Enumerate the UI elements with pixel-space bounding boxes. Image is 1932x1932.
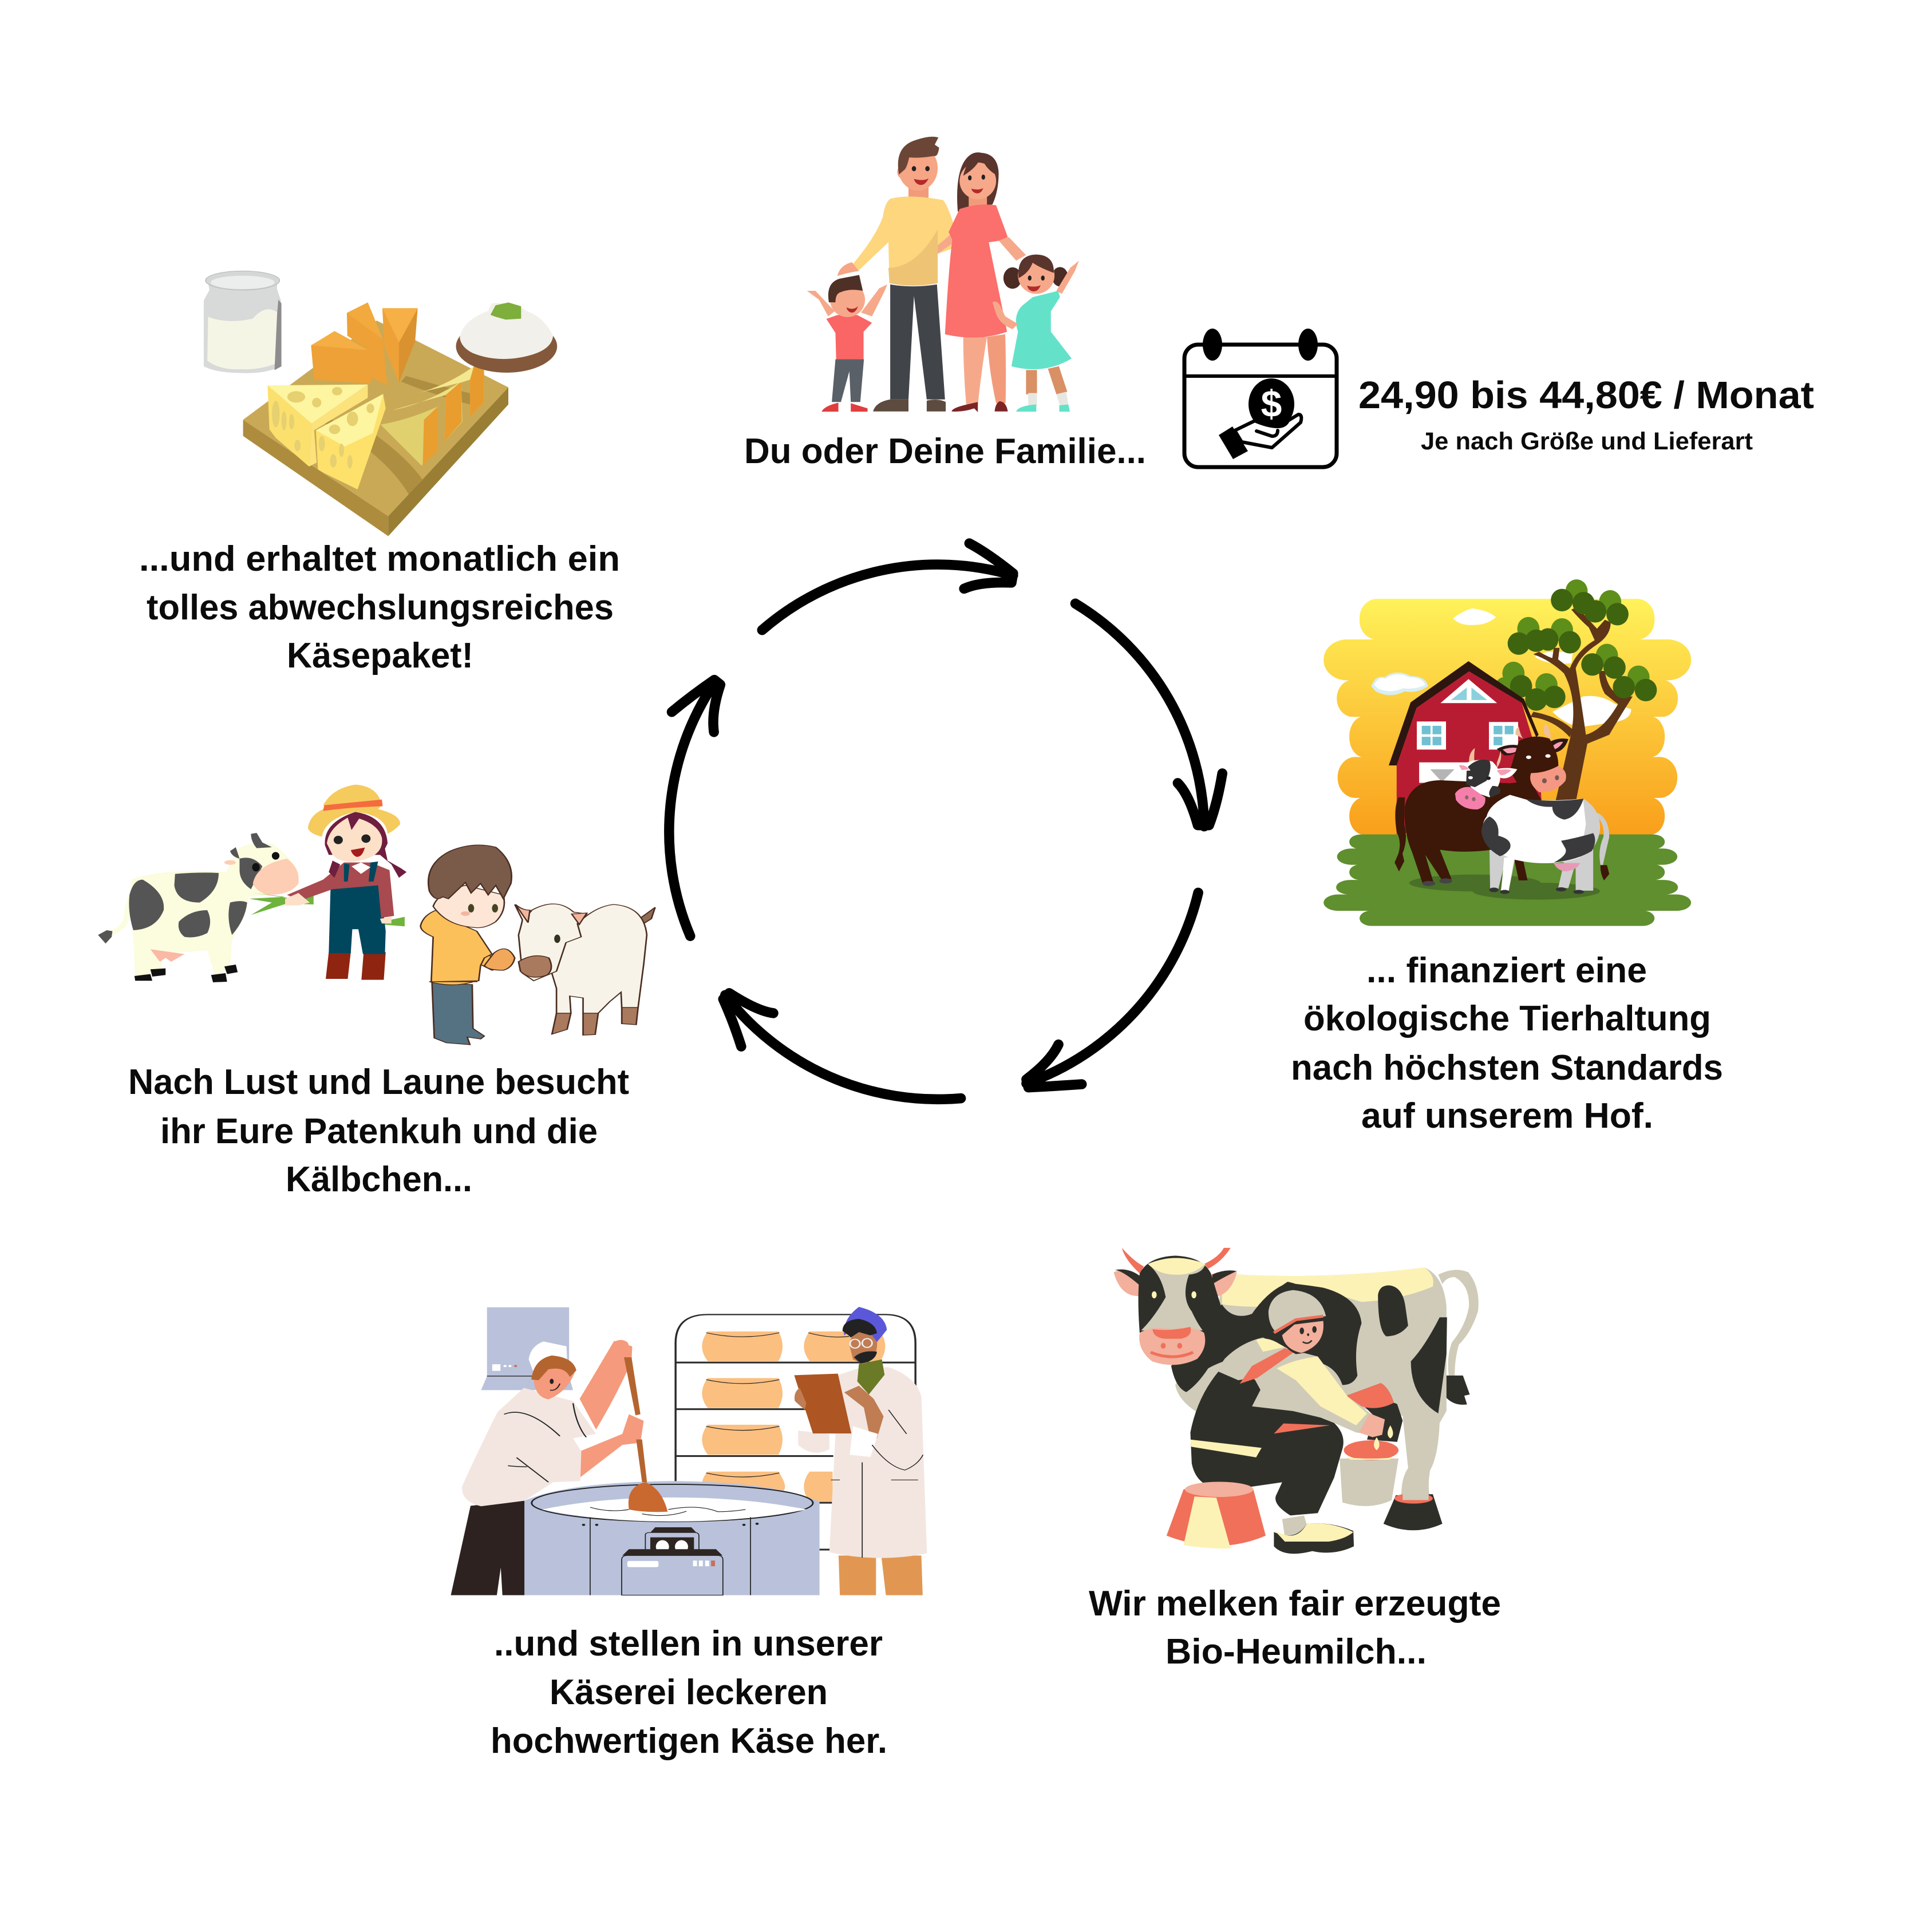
text: dairy caption [491, 1624, 887, 1761]
text: farm caption: nach höchsten Standards [1291, 1048, 1723, 1088]
text: cheese package caption: ...und erhaltet monatlich ein [139, 539, 620, 579]
icon: family illustration [807, 137, 1079, 412]
icon: cheese makers in dairy [451, 1307, 927, 1595]
left cheesemaker [451, 1340, 667, 1595]
arrow: milking to dairy [1026, 892, 1198, 1088]
arrow: dairy to visit [723, 993, 961, 1099]
grass bundle [249, 893, 405, 929]
text: farm caption [1291, 951, 1723, 1136]
arrow: visit to cheese [669, 680, 720, 936]
man [837, 137, 959, 412]
sky [1323, 599, 1691, 835]
text: dairy caption: Käserei leckeren [550, 1673, 828, 1712]
text: cheese package caption: tolles abwechslungsreiches [147, 588, 614, 627]
text: dairy caption: ..und stellen in unserer [494, 1624, 883, 1664]
circular arrows [669, 543, 1222, 1099]
icon: calendar with coin in hand: $ [1261, 382, 1282, 425]
text: visit caption: Kälbchen... [286, 1160, 472, 1199]
tree [1495, 579, 1657, 803]
text: milking caption: Bio-Heumilch... [1165, 1632, 1427, 1672]
girl [993, 255, 1079, 412]
icon: cheese board with milk jar and cream cheese [204, 271, 557, 536]
white calf [515, 904, 655, 1035]
icon: calendar with coin in hand [1184, 329, 1337, 467]
cheese shelves [675, 1314, 915, 1551]
text: family caption: Du oder Deine Familie... [744, 432, 1146, 471]
text: cheese package caption [139, 539, 620, 675]
cheese vat [524, 1481, 820, 1595]
ground shadows [1409, 875, 1600, 899]
cream cheese on bread [456, 302, 557, 373]
right inspector [794, 1307, 927, 1595]
stool [1167, 1482, 1266, 1548]
text: farm caption: ökologische Tierhaltung [1303, 999, 1711, 1038]
text: cheese package caption: Käsepaket! [287, 636, 473, 675]
text: farm caption: auf unserem Hof. [1361, 1096, 1653, 1136]
text: price note: Je nach Größe und Lieferart [1421, 428, 1753, 455]
spotted cow [98, 833, 299, 982]
grass [1323, 835, 1691, 926]
icon: farmer milking a cow [1113, 1248, 1479, 1554]
text: visit caption: ihr Eure Patenkuh und die [160, 1112, 598, 1151]
black and white cow [1455, 748, 1609, 894]
milk pail and udder [1340, 1383, 1402, 1506]
text: dairy caption: hochwertigen Käse her. [491, 1721, 887, 1761]
boy in yellow hoodie [421, 845, 515, 1045]
text: price: 24,90 bis 44,80€ / Monat [1358, 374, 1814, 417]
clouds [1371, 609, 1631, 727]
arrow: farm to milking [1076, 603, 1222, 827]
yellow holey cheese [267, 385, 386, 489]
farmer [1190, 1282, 1385, 1554]
woman [938, 152, 1026, 412]
text: milking caption: Wir melken fair erzeugte [1089, 1584, 1501, 1623]
text: visit caption: Nach Lust und Laune besucht [128, 1062, 629, 1102]
wall panel and hood [481, 1307, 573, 1390]
barn [1389, 661, 1542, 835]
pale cheese slices [381, 366, 484, 465]
orange cheese [311, 302, 418, 385]
cow head [1113, 1248, 1237, 1365]
text: visit caption [128, 1062, 629, 1199]
text: milking caption [1089, 1584, 1501, 1672]
brown cow [1394, 723, 1568, 886]
milk jar [204, 271, 282, 373]
arrow: family to farm [762, 543, 1013, 630]
boy [807, 275, 887, 412]
text: farm caption: ... finanziert eine [1366, 951, 1647, 990]
cow body [1171, 1267, 1479, 1530]
icon: farm with barn, tree and cows [1323, 579, 1691, 926]
farm girl [285, 785, 406, 980]
icon: children with cows [98, 785, 655, 1045]
wooden board [243, 321, 508, 536]
